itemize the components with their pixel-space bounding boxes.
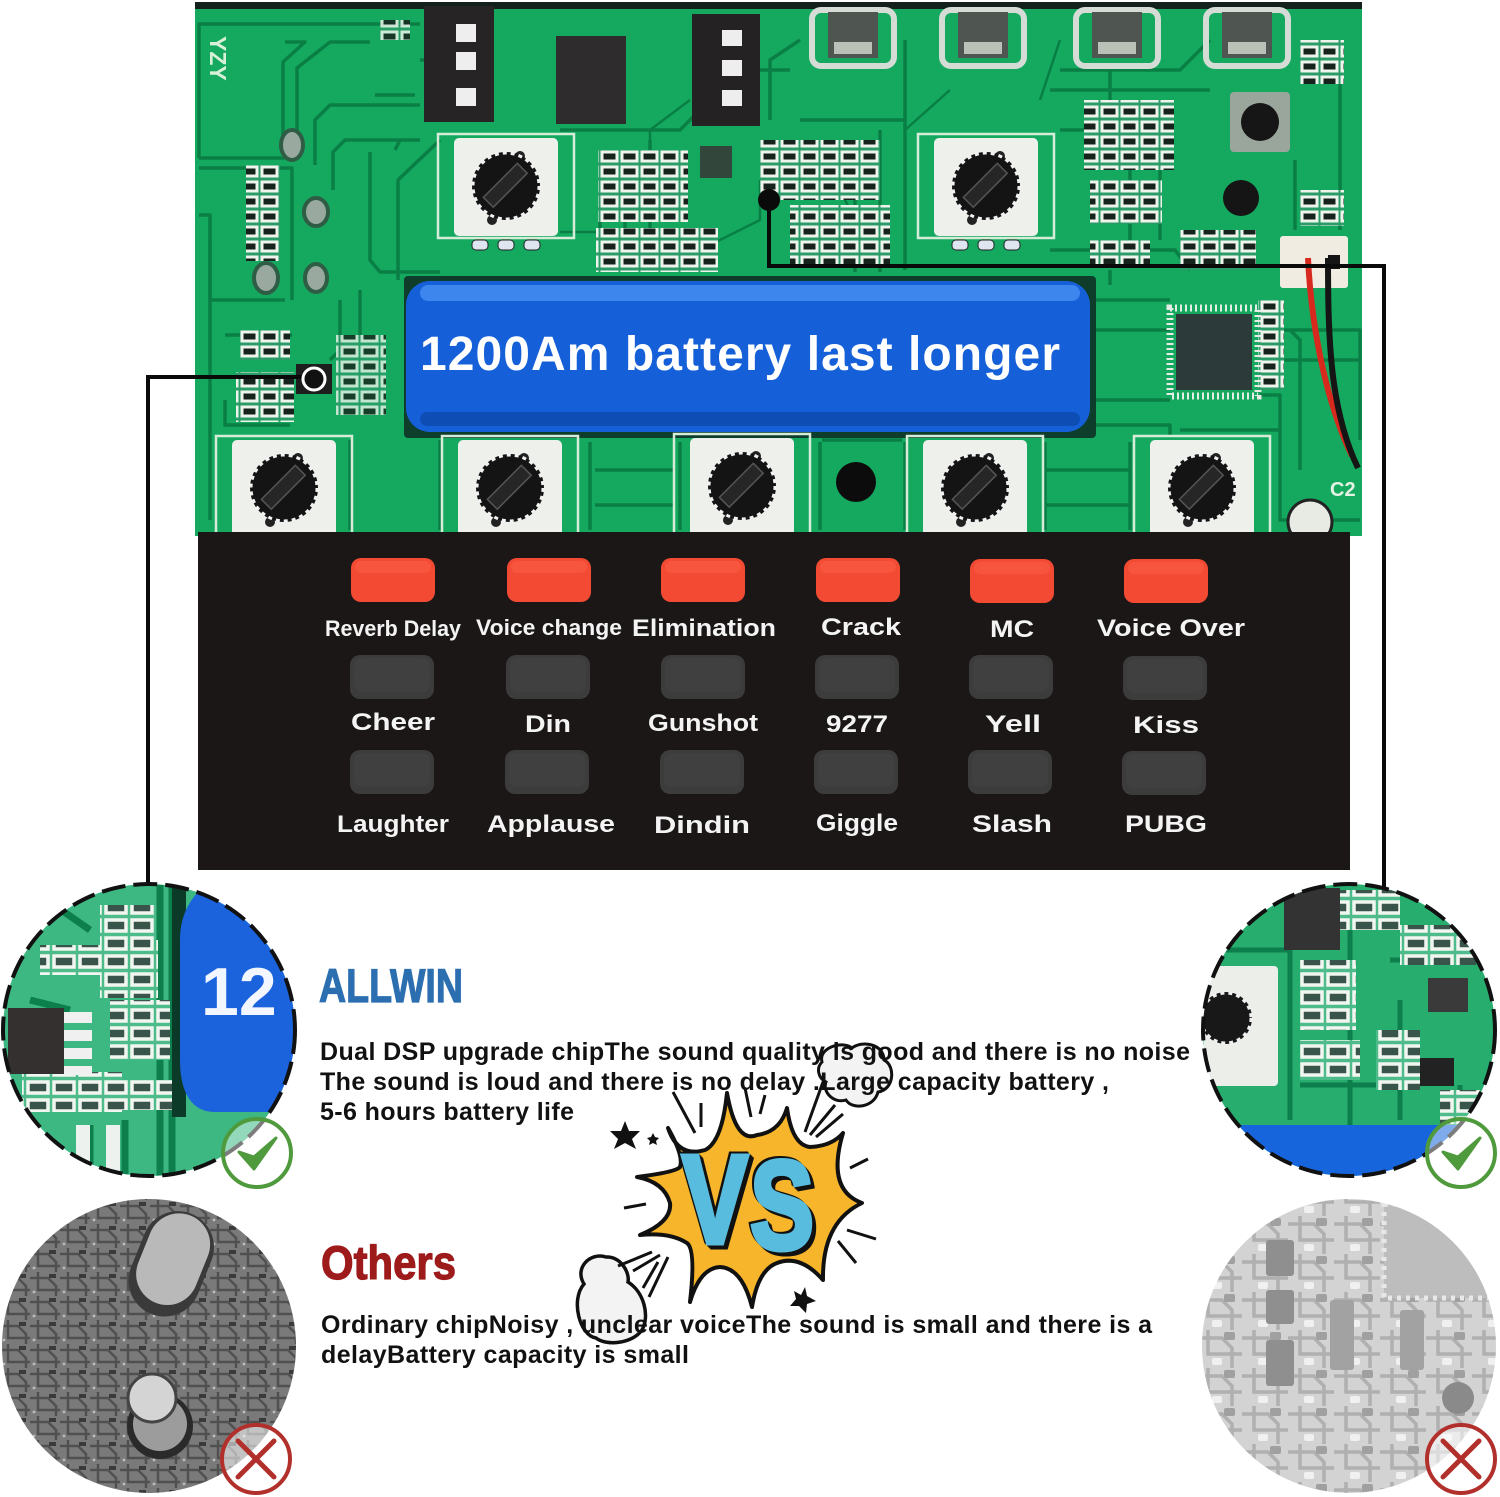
button labels: Voice change bbox=[476, 615, 622, 640]
chip pins bbox=[64, 1012, 92, 1075]
smoke puff top bbox=[819, 1044, 892, 1106]
icon: VS comic burst bbox=[577, 1044, 892, 1343]
sound buttons row 2 bbox=[350, 655, 1207, 700]
button labels: Reverb Delay bbox=[325, 616, 462, 641]
button labels: Yell bbox=[985, 711, 1041, 738]
text block: ALLWIN description: Dual DSP upgrade chipThe sound quality is good and there is no noise bbox=[320, 1038, 1190, 1066]
circle: ALLWIN chip closeup: 12 bbox=[201, 954, 277, 1030]
button labels: PUBG bbox=[1125, 811, 1207, 838]
action lines bbox=[618, 1082, 876, 1297]
reset button bbox=[1223, 92, 1290, 216]
text block: Others description: Ordinary chipNoisy , unclear voiceThe sound is small and there is a bbox=[321, 1311, 1153, 1339]
button labels: 9277 bbox=[826, 711, 888, 738]
small chips bbox=[296, 146, 1258, 396]
circle: ordinary board dark bbox=[0, 1198, 300, 1497]
battery bbox=[404, 276, 1096, 438]
button labels: Cheer bbox=[351, 709, 435, 736]
button labels: Applause bbox=[487, 811, 615, 838]
panel: circuit board bbox=[195, 2, 1362, 544]
heading: ALLWIN: ALLWIN bbox=[319, 959, 463, 1012]
button labels: Dindin bbox=[654, 812, 750, 839]
circle: ordinary board light bbox=[1200, 1198, 1500, 1497]
button labels: Crack bbox=[821, 614, 902, 641]
icon: check right bbox=[1427, 1119, 1495, 1187]
button labels: Voice Over bbox=[1097, 615, 1245, 642]
stars bbox=[610, 1121, 640, 1149]
button labels: Laughter bbox=[337, 811, 449, 838]
icon: cross left bbox=[222, 1425, 290, 1493]
connectors along top edge bbox=[424, 6, 1288, 126]
text block: ALLWIN description: The sound is loud and there is no delay .Large capacity battery , bbox=[320, 1068, 1109, 1096]
text block: ALLWIN description: 5-6 hours battery life bbox=[320, 1098, 574, 1126]
text block: Others description: delayBattery capacity is small bbox=[321, 1341, 689, 1369]
button labels: Giggle bbox=[816, 810, 898, 837]
smoke puff bottom bbox=[577, 1256, 646, 1343]
button labels: Slash bbox=[972, 811, 1052, 838]
callout line: right chip bbox=[758, 189, 1384, 890]
potentiometers top bbox=[438, 134, 1054, 250]
panel: control panel bbox=[198, 532, 1350, 870]
V letter: V bbox=[682, 1129, 748, 1270]
copper traces bbox=[199, 24, 1360, 530]
circle: ALLWIN board closeup bbox=[1200, 880, 1500, 1185]
button labels: Elimination bbox=[632, 615, 776, 642]
mounting holes and solder pads bbox=[254, 130, 328, 293]
burst star bbox=[637, 1093, 862, 1307]
sound buttons row 3 bbox=[350, 750, 1206, 795]
capacitor: C2 bbox=[1330, 479, 1356, 501]
board silk text: YZY bbox=[205, 36, 231, 81]
button labels: MC bbox=[990, 616, 1034, 643]
SMD component clusters bbox=[236, 20, 1344, 422]
icon: check left bbox=[223, 1119, 291, 1187]
text block: ALLWIN description bbox=[320, 1038, 1190, 1126]
S letter: S bbox=[750, 1135, 814, 1276]
battery connector and wires bbox=[1280, 236, 1358, 468]
circle: ALLWIN chip closeup bbox=[0, 880, 310, 1180]
battery: 1200Am battery last longer bbox=[420, 328, 1060, 381]
heading: Others: Others bbox=[321, 1236, 456, 1289]
button labels: Gunshot bbox=[648, 710, 758, 737]
button labels: Din bbox=[525, 711, 571, 738]
effect buttons red bbox=[351, 558, 1208, 603]
text block: Others description bbox=[321, 1311, 1153, 1369]
button labels: Kiss bbox=[1133, 712, 1199, 739]
icon: cross right bbox=[1427, 1425, 1495, 1493]
potentiometers bottom bbox=[216, 434, 1270, 540]
button labels bbox=[325, 614, 1245, 839]
callout line: left chip bbox=[148, 368, 325, 890]
capacitor bbox=[1288, 479, 1356, 544]
